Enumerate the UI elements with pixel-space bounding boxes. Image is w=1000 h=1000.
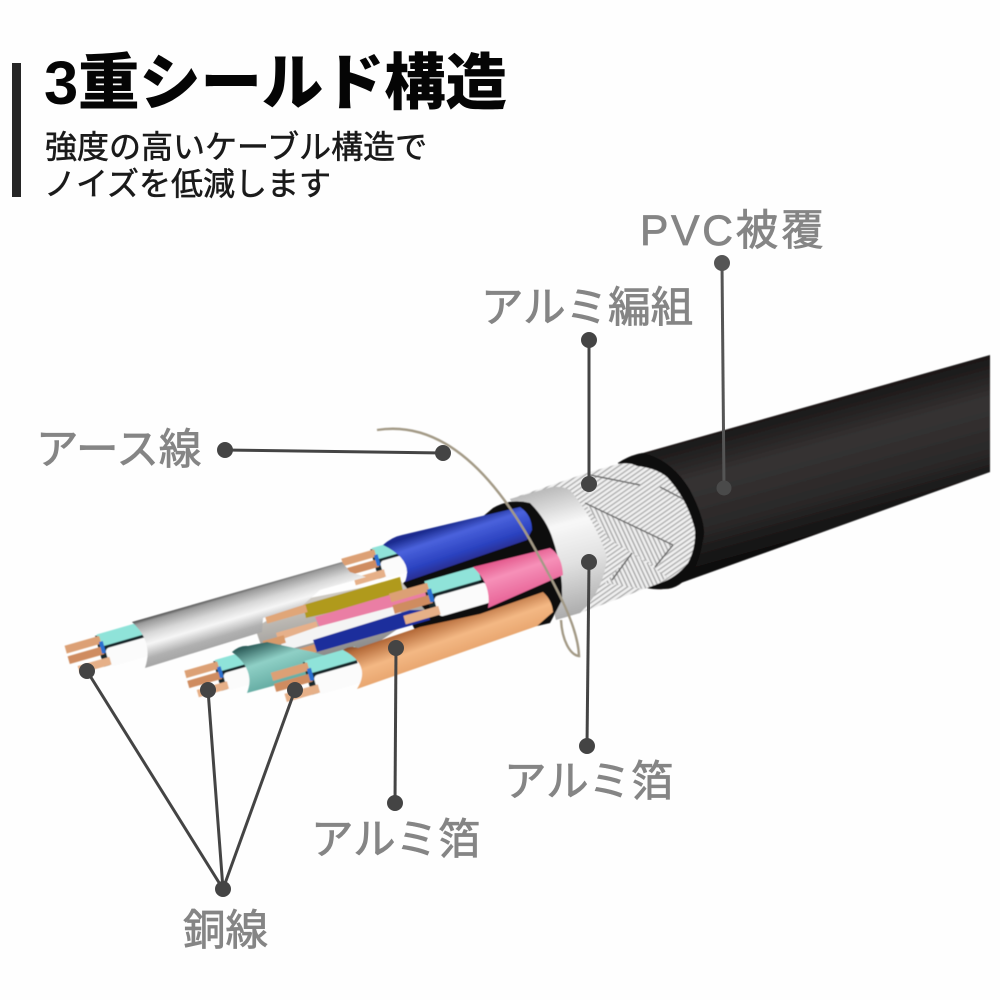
leader: aluminium foil left	[388, 640, 404, 810]
dark blue wire	[313, 610, 430, 652]
pink conductor cable	[473, 548, 563, 608]
blue conductor wires	[341, 534, 430, 589]
inner wires	[263, 577, 434, 664]
pink conductor wires	[388, 565, 492, 629]
teal wires	[184, 646, 273, 701]
leader: aluminium braid	[582, 332, 596, 492]
earth wire	[377, 429, 579, 656]
cable opening	[395, 501, 562, 640]
cable illustration	[64, 355, 990, 706]
label: earth wire: アース線	[36, 427, 201, 474]
label: aluminium foil right: アルミ箔	[504, 759, 674, 806]
copper wires	[270, 645, 369, 706]
inner core backing	[255, 580, 425, 662]
jacket opening rim	[618, 453, 704, 589]
leader: aluminium foil right	[580, 554, 596, 754]
pink wire	[315, 583, 434, 628]
subtitle: ノイズを低減します	[44, 166, 331, 202]
copper foil cable	[343, 592, 553, 689]
foil shield	[510, 487, 607, 620]
white wire	[280, 605, 402, 651]
teal foil cable	[232, 642, 340, 693]
label: aluminium braid: アルミ編組	[481, 285, 693, 332]
leaders: copper wire	[80, 664, 302, 896]
blue conductor cable	[383, 507, 532, 582]
braided shield	[518, 462, 696, 612]
leader: PVC jacket	[714, 256, 732, 496]
heading accent bar	[12, 63, 21, 197]
label: aluminium foil left: アルミ箔	[311, 817, 481, 864]
subtitle	[44, 129, 427, 202]
label: copper wire: 銅線	[183, 908, 268, 955]
outer jacket	[618, 355, 990, 589]
gray wires	[64, 620, 158, 677]
olive wire	[303, 577, 404, 618]
title: 3重シールド構造	[44, 49, 507, 118]
subtitle: 強度の高いケーブル構造で	[45, 129, 427, 165]
label: PVC jacket: PVC被覆	[640, 208, 826, 255]
gray foil cable	[132, 562, 366, 668]
leader: earth wire	[218, 442, 450, 460]
